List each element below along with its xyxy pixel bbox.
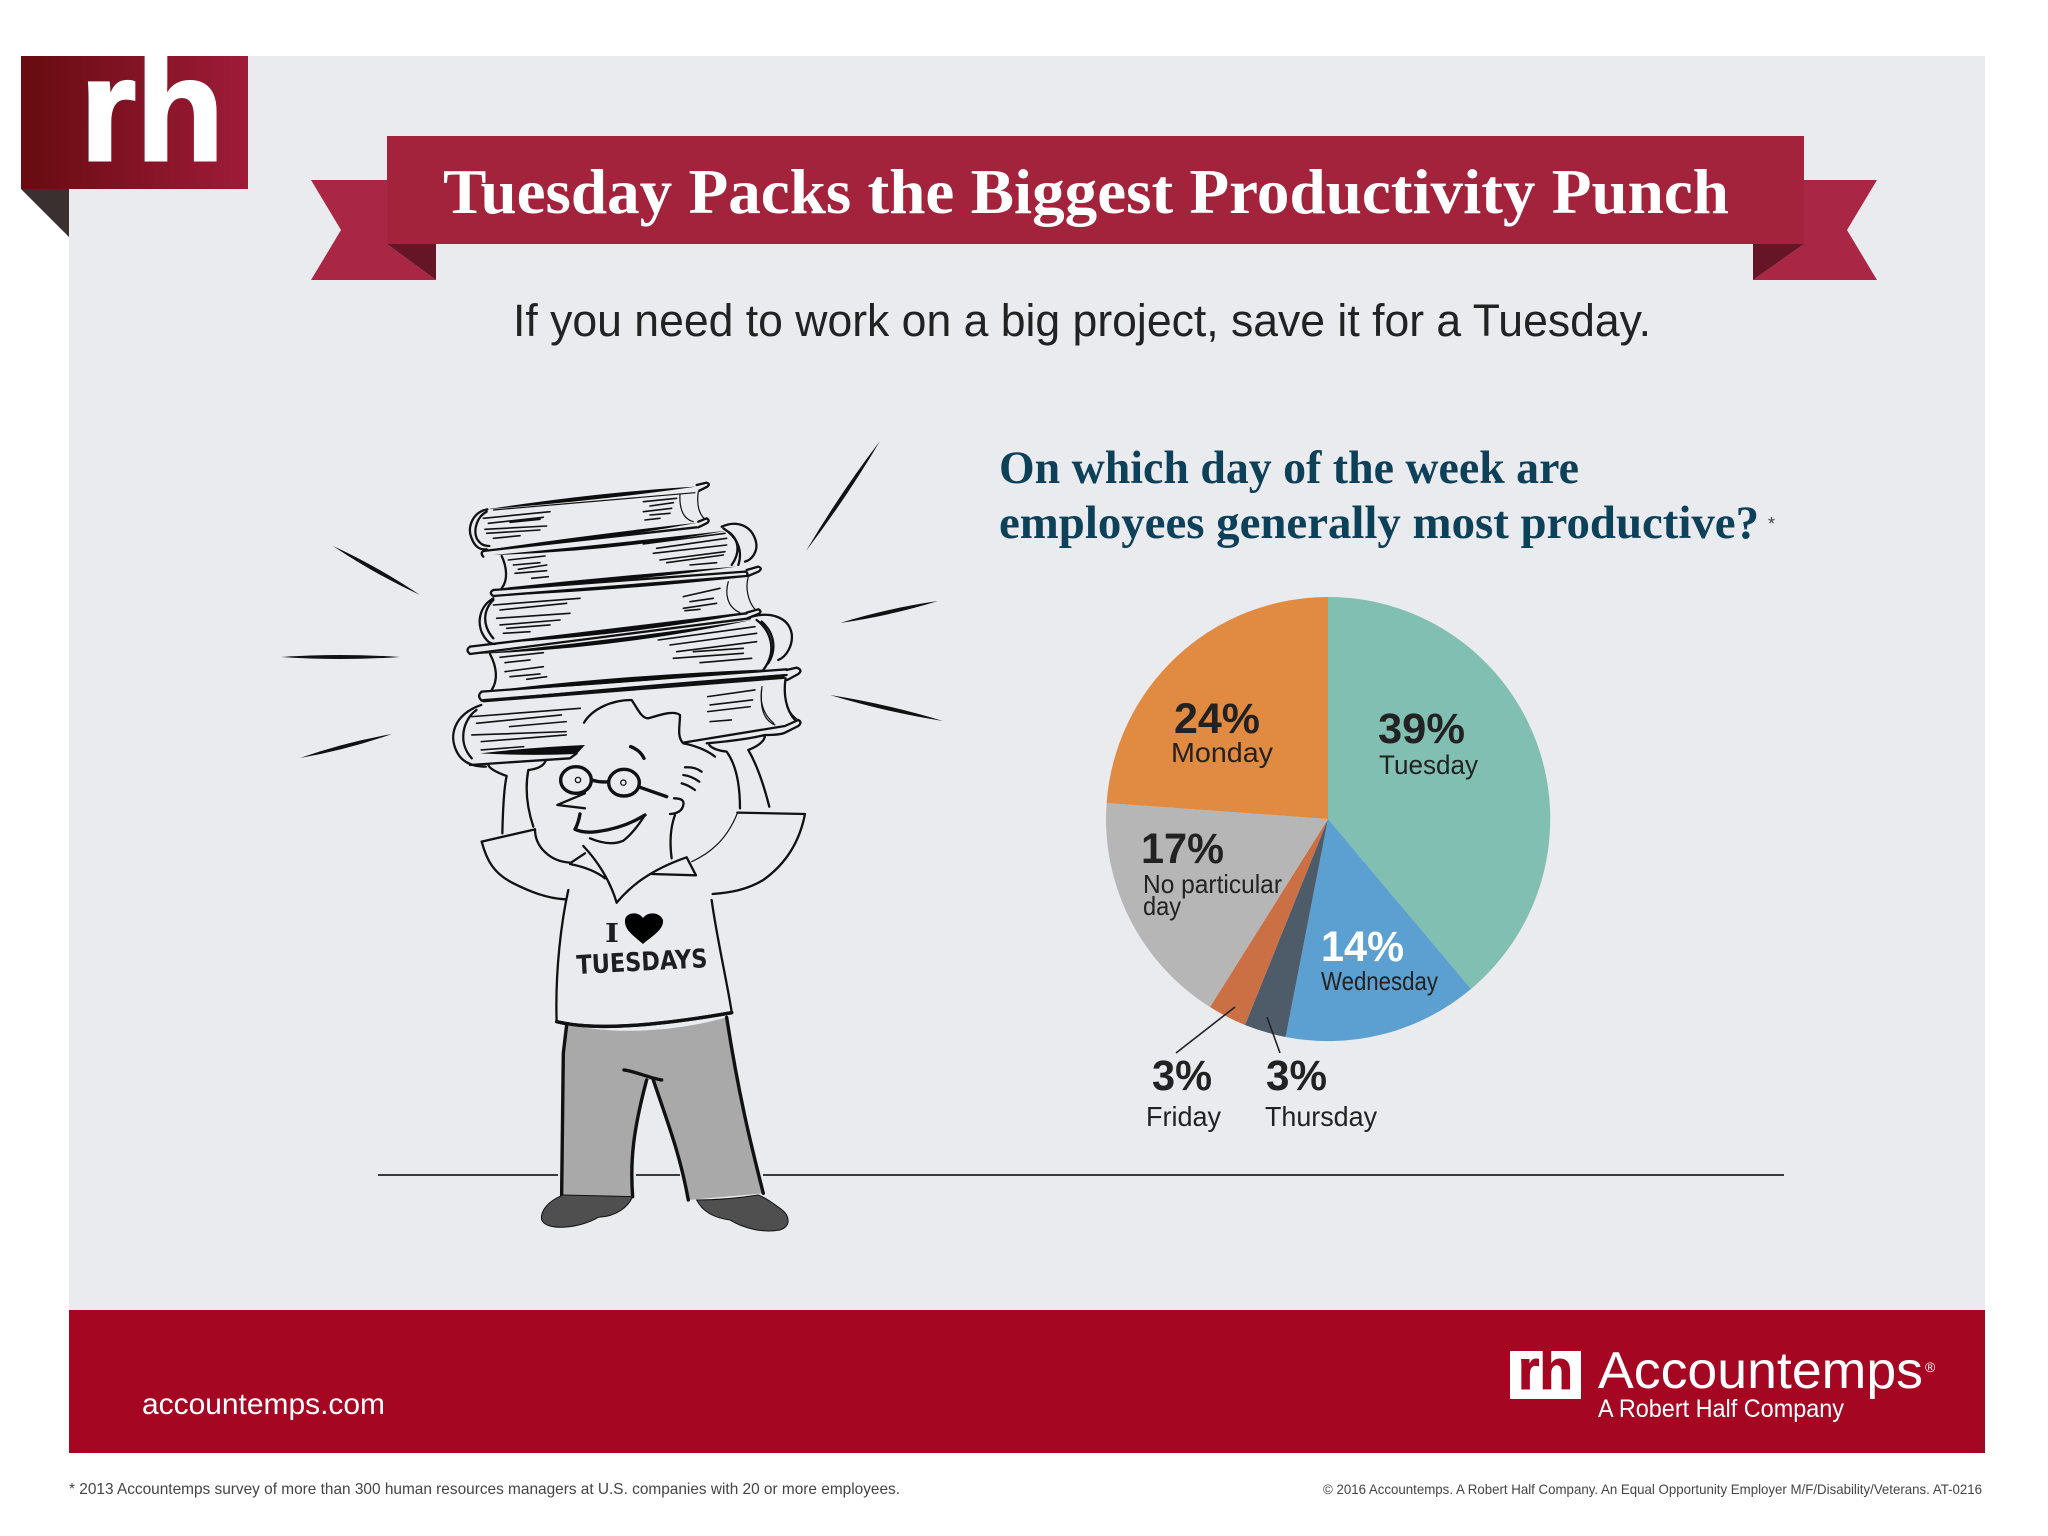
footer url: accountemps.com: [142, 1388, 385, 1421]
label: No particular day: No particular: [1143, 869, 1282, 899]
rh logo tab: rh: [80, 28, 224, 191]
label: Tuesday: Tuesday: [1379, 750, 1478, 780]
footer logo: Accountemps: Accountemps: [1598, 1342, 1923, 1400]
background panel: [69, 56, 1985, 1311]
label: Monday: 24%: [1174, 695, 1260, 743]
label: Tuesday: [1378, 705, 1478, 780]
bottom book: [453, 677, 795, 767]
label: Wednesday: 14%: [1321, 923, 1404, 971]
label: Wednesday: Wednesday: [1321, 966, 1438, 996]
illustration: man lifting stack of books: [453, 483, 805, 1231]
label: Monday: Monday: [1171, 737, 1273, 768]
chart question heading: employees generally most productive?: [999, 497, 1759, 549]
slice: No particular day 17%: [1106, 803, 1328, 1007]
label: Thursday: [1265, 1052, 1377, 1132]
label: Wednesday: [1321, 923, 1438, 996]
shirt slogan: TUESDAYS: [576, 944, 708, 981]
slice: Tuesday 39%: [1328, 597, 1550, 989]
footer band: [69, 1310, 1985, 1453]
shoes: [541, 1195, 788, 1231]
label: Friday: 3%: [1152, 1052, 1212, 1100]
subtitle: If you need to work on a big project, save it for a Tuesday.: [513, 295, 1651, 346]
leader line: Thursday: [1267, 1017, 1280, 1053]
chart question heading: [999, 442, 1775, 549]
emphasis rays around the books: [281, 441, 943, 758]
label: Friday: [1146, 1052, 1221, 1132]
trouser outlines: [557, 1013, 763, 1200]
head, glasses, arms, collar and sleeves: [470, 690, 805, 903]
upper four books: heavy cover lines: [477, 487, 787, 700]
chart question heading: *: [1768, 514, 1775, 534]
title: Tuesday Packs the Biggest Productivity Punch: [443, 156, 1729, 227]
title ribbon: [311, 136, 1877, 280]
shirt slogan: [576, 919, 708, 981]
shirt outline: [556, 890, 732, 1026]
footer logo: Accountemps: rh: [1518, 1338, 1573, 1401]
ground line: [378, 1174, 1784, 1176]
footer logo: Accountemps: [1510, 1351, 1936, 1422]
label: Monday: [1171, 695, 1273, 768]
label: No particular day: 17%: [1141, 825, 1224, 873]
label: No particular day: [1141, 825, 1282, 921]
label: Thursday: Thursday: [1265, 1101, 1377, 1132]
left underside of bottom book: [480, 745, 585, 755]
chart question heading: On which day of the week are: [999, 442, 1579, 494]
footnote: survey source: * 2013 Accountemps survey of more than 300 human resources managers at U.S. companies with 20 or more employees.: [69, 1481, 900, 1498]
footnote: copyright: © 2016 Accountemps. A Robert Half Company. An Equal Opportunity Employer M/F/Disability/Veterans. AT-0216: [1323, 1481, 1982, 1497]
slice: Monday 24%: [1107, 597, 1328, 819]
rh logo tab: [21, 56, 248, 237]
leader line: Friday: [1176, 1007, 1235, 1053]
label: Friday: Friday: [1146, 1101, 1221, 1132]
shirt slogan: I: [605, 919, 619, 949]
slice: Friday 3%: [1210, 819, 1328, 1025]
footer logo: Accountemps: ®: [1925, 1359, 1936, 1375]
slice: Thursday 3%: [1245, 819, 1328, 1037]
label: Tuesday: 39%: [1378, 705, 1465, 753]
upper four books: outlines: [467, 483, 800, 701]
slice: Wednesday 14%: [1286, 819, 1471, 1041]
icon: heart on shirt: [625, 913, 663, 944]
footer logo: Accountemps: A Robert Half Company: [1598, 1395, 1844, 1423]
label: Thursday: 3%: [1266, 1052, 1327, 1100]
pie chart: [1106, 597, 1550, 1132]
label: No particular day: day: [1143, 891, 1181, 921]
trousers: [562, 1017, 763, 1200]
